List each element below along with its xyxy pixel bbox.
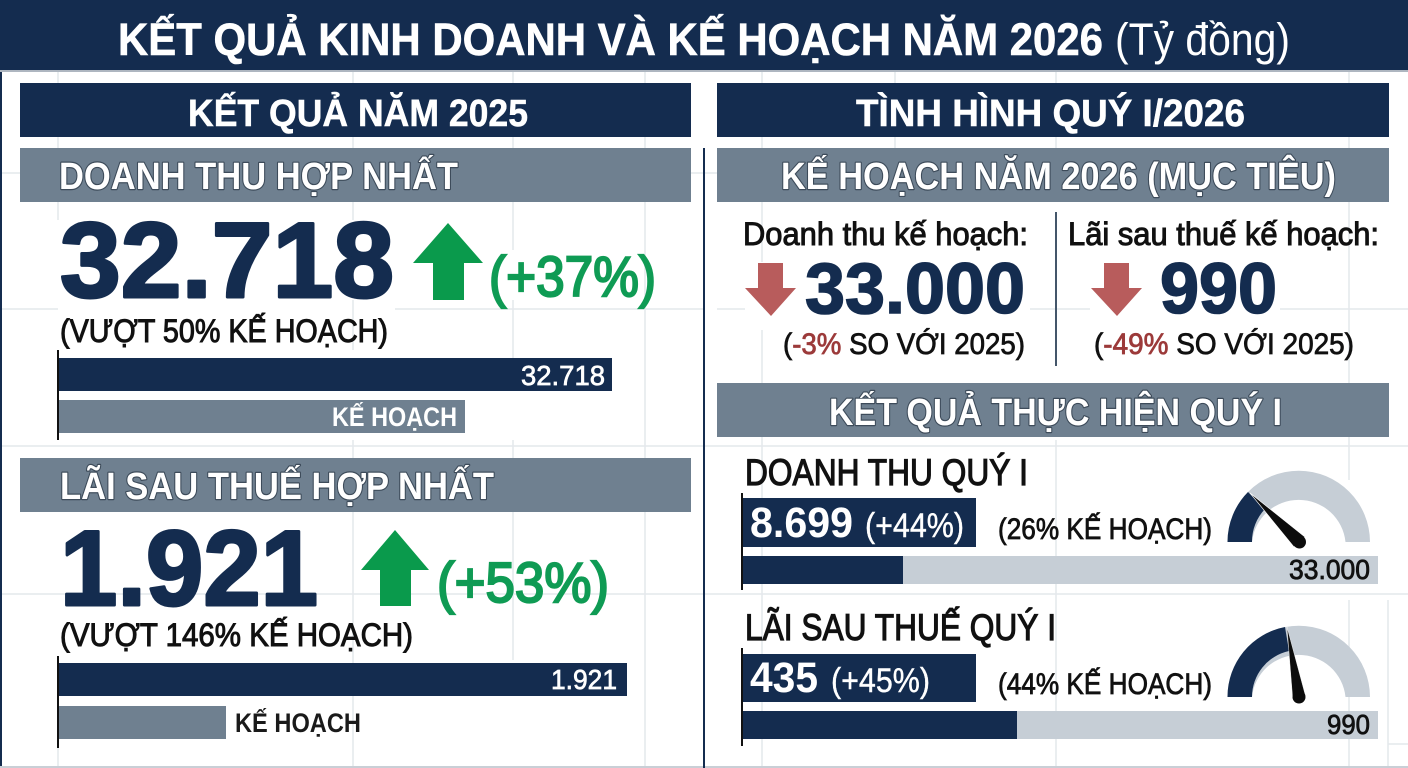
plan: profit target bbox=[1068, 216, 1379, 361]
bar chart: profit vs plan: KẾ HOẠCH bbox=[235, 707, 361, 738]
title: KẾT QUẢ KINH DOANH VÀ KẾ HOẠCH NĂM 2026 bbox=[118, 14, 1103, 65]
panel: results 2025 bbox=[20, 83, 691, 748]
plan: revenue target: (-3% SO VỚI 2025) bbox=[783, 328, 1025, 361]
subheading: Q1 results bbox=[717, 383, 1389, 437]
Q1 revenue block: (26% KẾ HOẠCH) bbox=[998, 512, 1212, 546]
heading: Q1 2026 bbox=[717, 83, 1389, 137]
subheading: consolidated revenue: DOANH THU HỢP NHẤT bbox=[59, 154, 458, 198]
Q1 profit block: LÃI SAU THUẾ QUÝ I bbox=[745, 607, 1056, 648]
profit value: 1.921 bbox=[60, 508, 318, 628]
revenue value: 32.718 bbox=[60, 200, 394, 320]
icon: green up arrow bbox=[361, 530, 429, 606]
Q1 revenue block: DOANH THU QUÝ I bbox=[745, 452, 1028, 493]
plan: profit target: Lãi sau thuế kế hoạch: bbox=[1068, 216, 1379, 252]
panel: Q1 2026 and plan bbox=[717, 83, 1389, 746]
Q1 profit block: 990 bbox=[1327, 709, 1370, 740]
profit vs plan note: (VƯỢT 146% KẾ HOẠCH) bbox=[60, 617, 413, 653]
plan: profit target: (-49% SO VỚI 2025) bbox=[1094, 328, 1354, 361]
Q1 revenue block: 33.000 bbox=[1289, 554, 1370, 585]
Q1 profit block: 435 bbox=[750, 654, 818, 702]
icon: red down arrow bbox=[1091, 263, 1142, 316]
Q1 revenue block: (+44%) bbox=[865, 507, 964, 545]
heading: Q1 2026: TÌNH HÌNH QUÝ I/2026 bbox=[856, 91, 1245, 135]
icon: green up arrow bbox=[413, 223, 483, 300]
plan: profit target: 990 bbox=[1160, 250, 1277, 329]
icon: red down arrow bbox=[745, 263, 796, 316]
revenue growth: (+37%) bbox=[489, 245, 656, 309]
subheading: consolidated profit: LÃI SAU THUẾ HỢP NHẤT bbox=[60, 464, 494, 508]
subheading: consolidated profit bbox=[20, 458, 691, 512]
plan: revenue target bbox=[743, 216, 1028, 361]
bar chart: profit vs plan: 1.921 bbox=[551, 664, 617, 695]
subheading: plan 2026 bbox=[717, 148, 1389, 202]
subheading: consolidated revenue bbox=[20, 148, 691, 202]
subheading: Q1 results: KẾT QUẢ THỰC HIỆN QUÝ I bbox=[829, 390, 1282, 434]
title bbox=[0, 0, 1408, 72]
plan: revenue target: 33.000 bbox=[805, 250, 1025, 329]
heading: results 2025: KẾT QUẢ NĂM 2025 bbox=[188, 91, 528, 135]
title: (Tỷ đồng) bbox=[1115, 14, 1290, 65]
bar chart: revenue vs plan: 32.718 bbox=[521, 360, 605, 391]
plan: revenue target: Doanh thu kế hoạch: bbox=[743, 216, 1028, 252]
gauge: 44% of plan bbox=[1227, 626, 1370, 704]
Q1 profit block bbox=[741, 607, 1378, 746]
bar chart: revenue vs plan: KẾ HOẠCH bbox=[332, 401, 457, 432]
Q1 profit block: (+45%) bbox=[831, 662, 930, 700]
bar chart: revenue vs plan bbox=[57, 350, 612, 440]
Q1 revenue block bbox=[741, 452, 1378, 590]
gauge: 26% of plan bbox=[1228, 471, 1370, 548]
heading: results 2025 bbox=[20, 83, 691, 137]
subheading: plan 2026: KẾ HOẠCH NĂM 2026 (MỤC TIÊU) bbox=[781, 154, 1336, 198]
Q1 profit block: (44% KẾ HOẠCH) bbox=[998, 667, 1212, 701]
bar chart: profit vs plan bbox=[57, 656, 627, 748]
Q1 revenue block: 8.699 bbox=[750, 499, 853, 547]
revenue vs plan note: (VƯỢT 50% KẾ HOẠCH) bbox=[60, 313, 388, 349]
profit growth: (+53%) bbox=[437, 551, 609, 615]
